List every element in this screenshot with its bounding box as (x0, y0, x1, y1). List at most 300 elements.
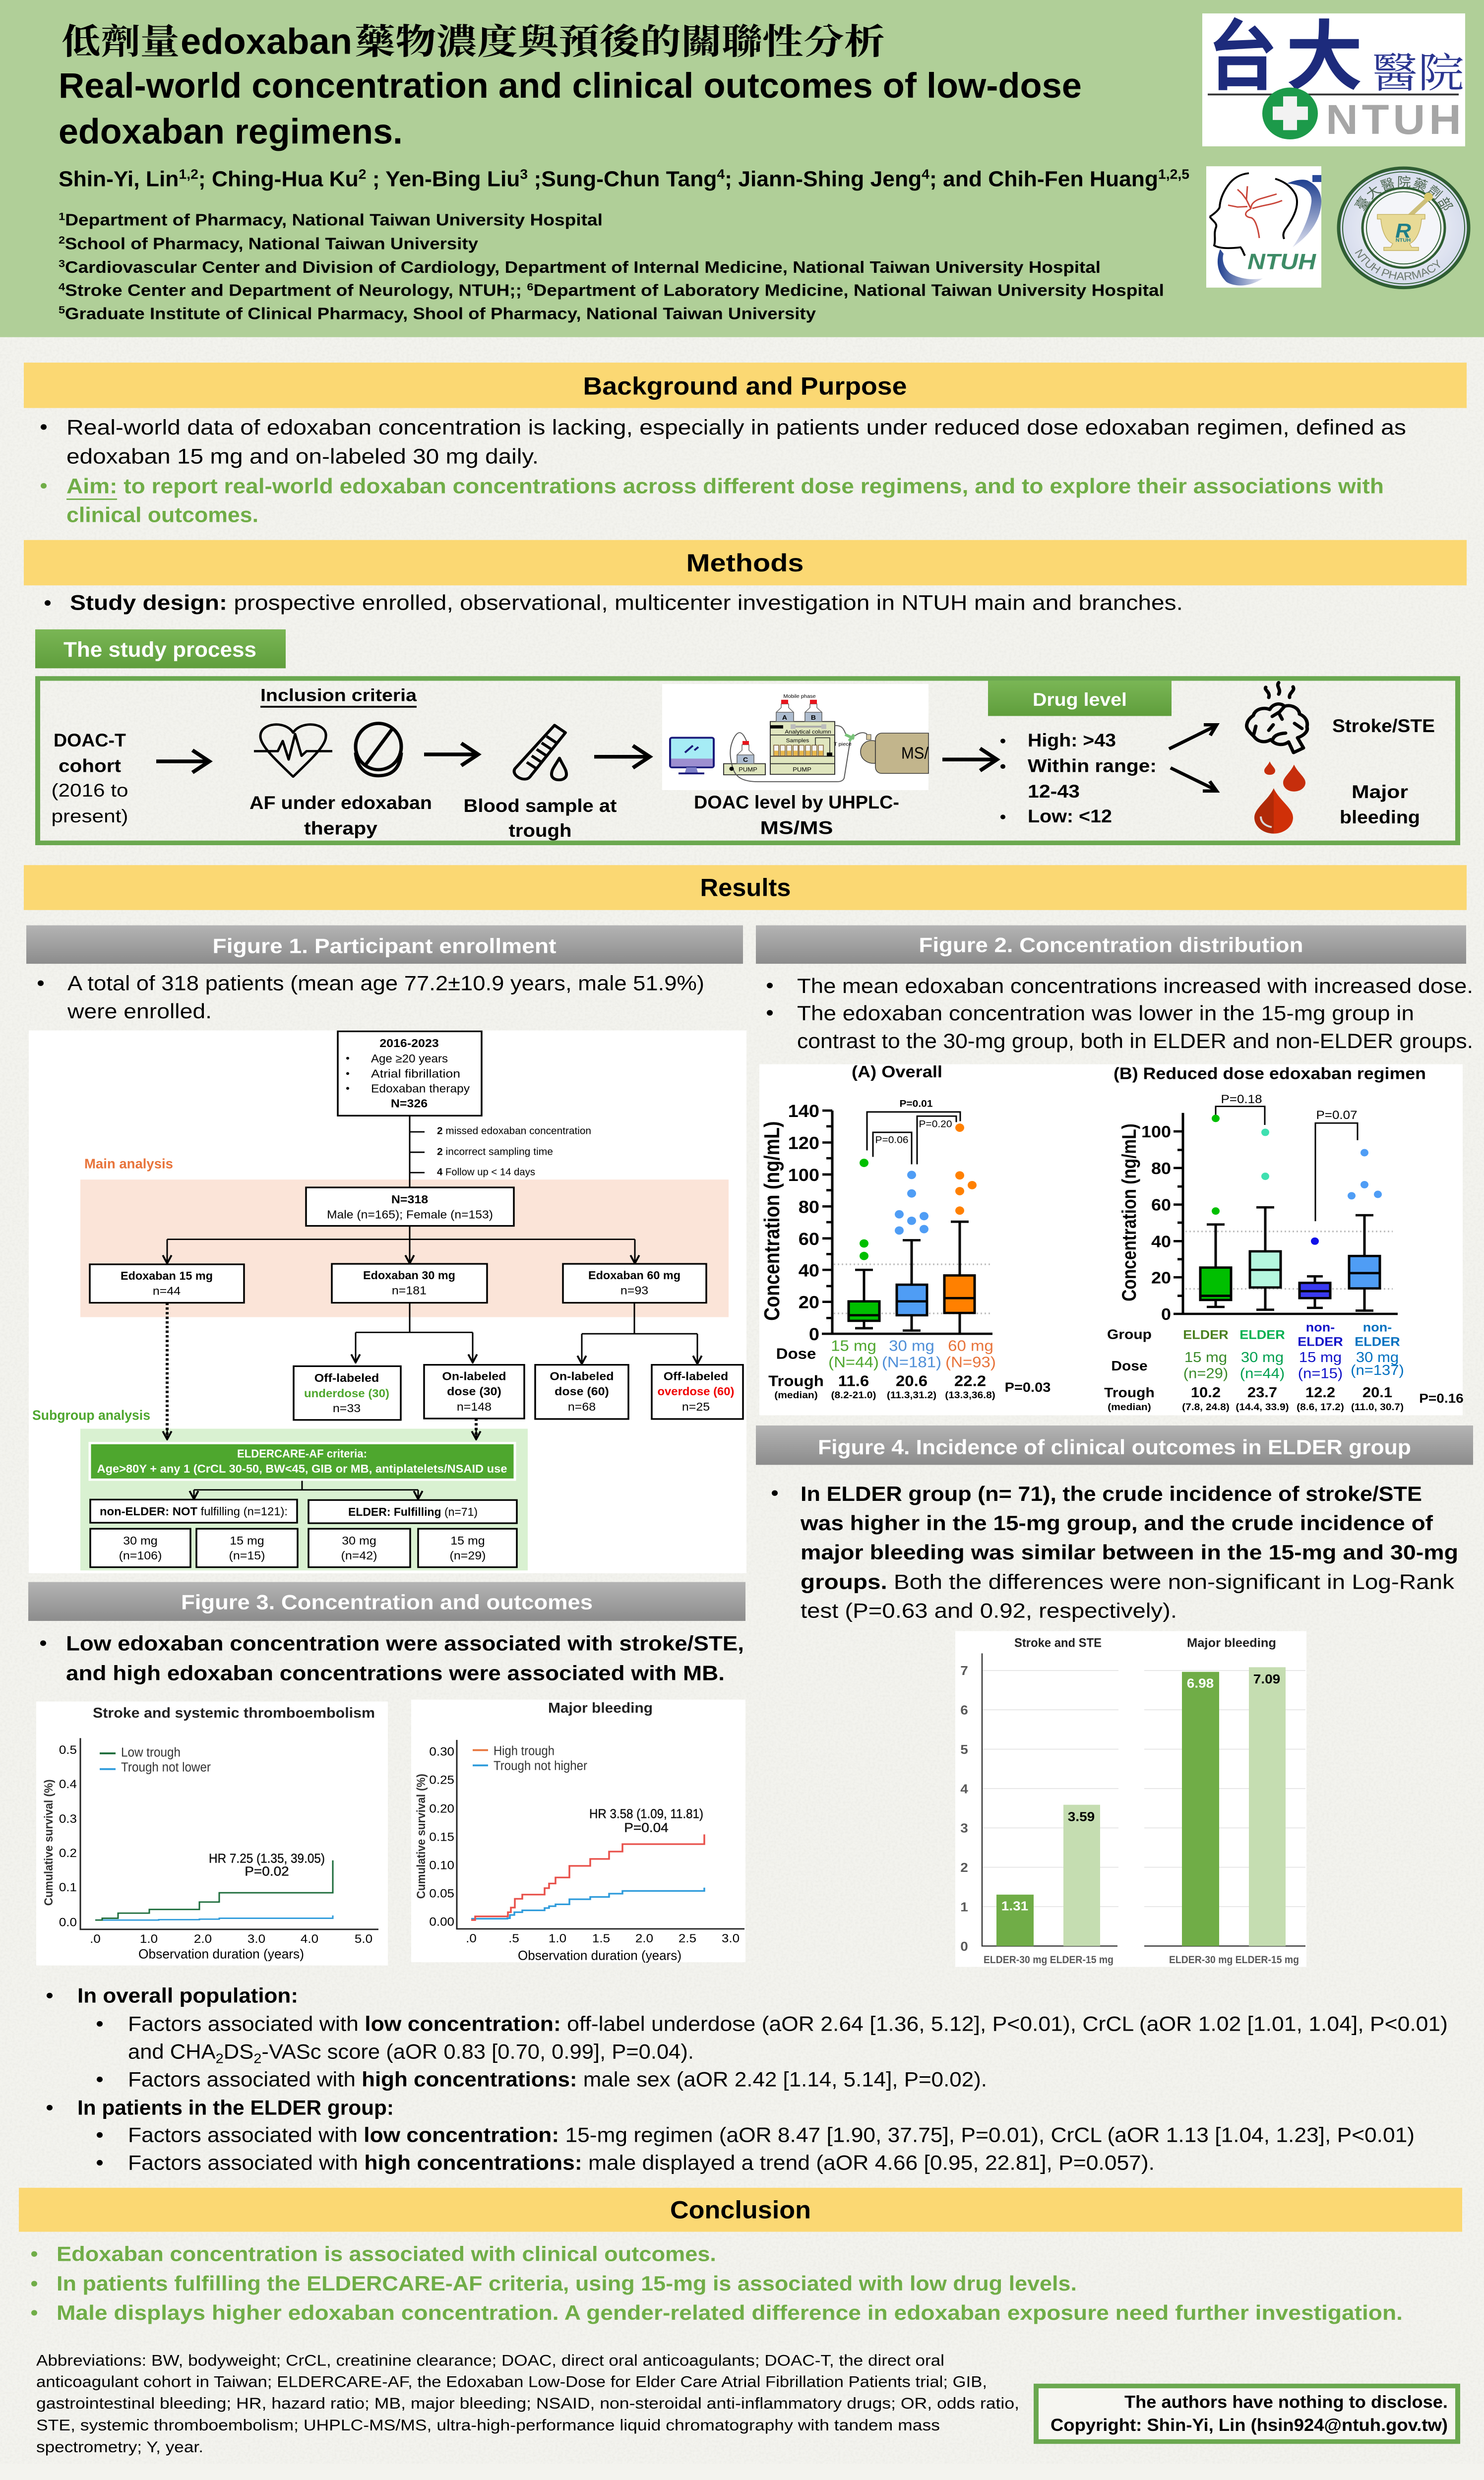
table: dose and trough: (N=44) (828, 1353, 879, 1370)
table: dose and trough: (N=181) (882, 1353, 941, 1370)
text block: figure 1: A total of 318 patients (mean age 77.2±10.9 years, male 51.9%) (67, 972, 704, 995)
icon: test tube and blood drop (514, 725, 566, 780)
authors: 2 (359, 167, 367, 182)
chart: major bleeding: 0.05 (429, 1887, 454, 1900)
text block: figure 3: Low edoxaban concentration were associated with stroke/STE, (66, 1632, 744, 1655)
text block: background: Real-world data of edoxaban concentration is lacking, especially in patients under reduced dose edoxaban regimen, defined as (66, 416, 1406, 439)
affiliations: 6 (527, 281, 534, 293)
logo: NTUH hospital (1202, 13, 1465, 146)
text block: abbreviations: anticoagulant cohort in Taiwan; ELDERCARE-AF, the Edoxaban Low-Dose for Elder Care Atrial Fibrillation Patients trial; GIB, (36, 2372, 987, 2390)
label: drug level: Drug level (1033, 689, 1127, 710)
arrow (156, 750, 209, 772)
table: group dose trough: (n=137) (1351, 1363, 1404, 1378)
table: group dose trough: 20.1 (1362, 1385, 1392, 1401)
icon: UHPLC instrument diagram: MS/ (901, 744, 928, 762)
text: exclusions (437, 1125, 591, 1178)
panel: study process (38, 679, 1458, 843)
bar: bleeding ELDER-30 mg: 6.98 (1187, 1675, 1214, 1690)
text block: figure 2: The mean edoxaban concentrations increased with increased dose. (797, 975, 1473, 998)
annotation: hazard ratio (589, 1806, 703, 1835)
box: off-labeled underdose: Off-labeled (314, 1372, 379, 1385)
text: DOAC-T cohort: (2016 to (51, 780, 128, 801)
box: 2016-2023 entry: Edoxaban therapy (371, 1082, 470, 1095)
axis labels: ELDER-30 mg ELDER-15 mg (984, 1954, 1113, 1966)
text block: figure 3 (40, 1632, 744, 1685)
table: dose and trough: P=0.03 (1005, 1380, 1051, 1395)
icon: UHPLC instrument diagram: Samples (786, 738, 809, 744)
chart: stroke and systemic thromboembolism: 0.2 (59, 1847, 77, 1860)
chart: (A) overall box plot: Concentration (ng/mL) (760, 1121, 784, 1321)
brackets: p values (867, 1099, 960, 1164)
arrow: to stroke (1169, 725, 1217, 749)
box: ELDER 15 mg (1200, 1115, 1231, 1307)
bar: bleeding ELDER-15 mg: 7.09 (1253, 1672, 1280, 1686)
heading: Figure 4: Figure 4. Incidence of clinical outcomes in ELDER group (818, 1436, 1411, 1459)
text block: background: edoxaban 15 mg and on-labeled 30 mg daily. (66, 445, 539, 468)
text block: background (41, 416, 1406, 468)
authors: ; Yen-Bing Liu (367, 167, 520, 191)
table: group dose trough: ELDER (1239, 1327, 1285, 1342)
arrow (424, 744, 478, 765)
box: edoxaban 30 mg: n=181 (392, 1284, 427, 1298)
table: group dose trough: Group (1107, 1327, 1152, 1342)
table: group dose trough: (7.8, 24.8) (1182, 1402, 1230, 1413)
table: dose and trough: 20.6 (896, 1372, 928, 1389)
bar: bleeding ELDER-30 mg (1182, 1672, 1219, 1946)
box: off-labeled underdose (294, 1366, 401, 1420)
text block: overall population factors: In overall population: (77, 1984, 298, 2007)
text block: ELDER group factors: Factors associated with low concentration: 15-mg regimen (aOR 8.47 [1.90, 37.75], P=0.01), CrCL (aOR 1.13 [1.04, 1.23], P<0.01) (128, 2124, 1415, 2147)
chart: (B) reduced dose box plot: 80 (1151, 1159, 1171, 1178)
table: group dose trough: 30 mg (1356, 1350, 1399, 1365)
table: group dose trough: P=0.16 (1419, 1391, 1464, 1406)
chart: (A) overall box plot: 20 (799, 1293, 819, 1312)
text: exclusions: 2 incorrect sampling time (437, 1146, 553, 1157)
box: on-labeled 60: dose (60) (555, 1385, 609, 1398)
box: non-ELDER 30 mg: 30 mg (123, 1535, 158, 1548)
chart: (B) reduced dose box plot: (B) Reduced dose edoxaban regimen (1113, 1064, 1426, 1083)
chart: stroke and systemic thromboembolism: 5.0 (355, 1932, 372, 1946)
chart: major bleeding: 0.15 (429, 1830, 454, 1844)
banner: ELDERCARE-AF criteria: Age>80Y + any 1 (CrCL 30-50, BW<45, GIB or MB, antiplatelets/NSAID use (97, 1463, 507, 1476)
box: non-ELDER 15 mg (196, 1529, 298, 1567)
box: edoxaban 30 mg: Edoxaban 30 mg (363, 1269, 455, 1282)
chart: incidence bar chart: 3 (960, 1821, 968, 1835)
box: non-ELDER 30 mg: (n=106) (119, 1550, 162, 1562)
curve: low trough (95, 1860, 333, 1920)
heading: Figure 3: Figure 3. Concentration and outcomes (181, 1591, 593, 1614)
icon: UHPLC instrument diagram: A (782, 714, 787, 721)
callout: disclosure and copyright (1036, 2386, 1458, 2442)
axis labels: ELDER-30 mg ELDER-15 mg (1169, 1954, 1299, 1966)
section heading: Background and Purpose (24, 363, 1467, 408)
text block: study design: Study design: prospective enrolled, observational, multicenter investigation in NTUH main and branches. (70, 591, 1183, 615)
table: group dose trough: non- (1363, 1320, 1392, 1334)
table: group dose trough: (n=29) (1183, 1366, 1228, 1381)
title: Chinese: 藥物濃度與預後的關聯性分析 (355, 22, 885, 62)
text block: conclusion: Male displays higher edoxaban concentration. A gender-related difference in edoxaban exposure need further investigation. (57, 2301, 1403, 2325)
chart: (B) reduced dose box plot (1104, 1064, 1464, 1413)
table: group dose trough: ELDER (1183, 1327, 1229, 1342)
text: DOAC-T cohort: DOAC-T (54, 730, 126, 751)
table: dose and trough: (median) (774, 1390, 818, 1401)
box: edoxaban 60 mg (563, 1264, 706, 1303)
table: group dose trough: (14.4, 33.9) (1236, 1402, 1289, 1413)
box: on-labeled 60: On-labeled (550, 1370, 614, 1383)
chart: (B) reduced dose box plot: 20 (1151, 1268, 1171, 1287)
title: Chinese (62, 21, 885, 62)
icon: UHPLC instrument diagram: T piece (834, 742, 852, 747)
text block: figure 4 (772, 1483, 1458, 1622)
bar: stroke ELDER-30 mg: 1.31 (1001, 1898, 1028, 1913)
text block: overall population factors: 2 (216, 2051, 224, 2066)
text block: overall population factors: -VASc score (aOR 0.83 [0.70, 0.99], P=0.04). (261, 2041, 694, 2063)
callout: disclosure and copyright: Copyright: Shin-Yi, Lin (hsin924@ntuh.gov.tw) (1051, 2415, 1448, 2435)
section heading: Background and Purpose: Background and Purpose (583, 372, 907, 400)
box: 2016-2023 entry: Atrial fibrillation (371, 1067, 460, 1081)
affiliations: 4 (59, 281, 65, 293)
authors: 4 (922, 167, 929, 182)
text: DOAC level by UHPLC-MS/MS (694, 792, 899, 838)
text: inclusion criteria: Inclusion criteria (260, 685, 417, 705)
brackets: p values: P=0.18 (1221, 1093, 1262, 1106)
text: drug level ranges: Within range: (1028, 756, 1157, 776)
table: group dose trough: 15 mg (1299, 1350, 1342, 1365)
title: English line 2: edoxaban regimens. (59, 112, 403, 151)
brackets: p values: P=0.01 (899, 1099, 933, 1109)
bar: stroke ELDER-15 mg (1063, 1805, 1100, 1946)
chart: stroke and systemic thromboembolism: 1.0 (140, 1932, 158, 1946)
authors: 1,2 (179, 167, 198, 182)
text: DOAC level by UHPLC-MS/MS: DOAC level by UHPLC- (694, 792, 899, 813)
table: group dose trough: (n=15) (1298, 1366, 1343, 1381)
text block: abbreviations: gastrointestinal bleeding; HR, hazard ratio; MB, major bleeding; NSAID, non-steroidal anti-inflammatory drugs; OR, odds ratio, (36, 2394, 1019, 2412)
text: blood sample at trough: trough (509, 820, 572, 841)
authors: 3 (520, 167, 528, 182)
text block: aim (41, 475, 1384, 527)
box: ELDER 15 mg: 15 mg (450, 1535, 485, 1548)
box: ELDER (309, 1500, 517, 1523)
header band (0, 0, 1484, 337)
text: drug level ranges (1000, 730, 1157, 827)
bar: stroke ELDER-30 mg (996, 1895, 1034, 1946)
box: off-labeled underdose: underdose (30) (304, 1387, 389, 1400)
table: group dose trough: 15 mg (1184, 1350, 1227, 1365)
box: off-labeled overdose: n=25 (682, 1401, 710, 1414)
text block: overall population factors: 2 (253, 2051, 261, 2066)
box: on-labeled 60 (535, 1365, 628, 1419)
icon: UHPLC instrument diagram: PUMP (793, 766, 811, 773)
chart: major bleeding: 0.20 (429, 1802, 454, 1815)
logo: NTUH hospital: 台 (1207, 14, 1278, 100)
label: drug level (988, 681, 1172, 716)
logo: NTUH hospital: 大 (1286, 14, 1363, 100)
table: dose and trough: Trough (768, 1372, 824, 1389)
icon: blood drops (1254, 761, 1305, 834)
table: group dose trough: 23.7 (1247, 1385, 1277, 1401)
table: group dose trough: ELDER (1355, 1334, 1400, 1349)
box: edoxaban 15 mg (90, 1264, 244, 1303)
chart: major bleeding: 0.25 (429, 1773, 454, 1787)
text: DOAC-T cohort (51, 730, 128, 827)
text: major bleeding (1340, 782, 1420, 828)
banner: ELDERCARE-AF criteria: ELDERCARE-AF criteria: (237, 1447, 367, 1460)
chart: (A) overall box plot: 140 (788, 1101, 819, 1121)
brackets: p values: P=0.06 (875, 1135, 909, 1145)
affiliations: Department of Pharmacy, National Taiwan University Hospital (65, 211, 603, 229)
text: DOAC-T cohort: present) (51, 806, 128, 827)
table: group dose trough: 12.2 (1305, 1385, 1335, 1401)
text block: overall population factors (47, 1984, 1448, 2091)
chart: (B) reduced dose box plot: 40 (1151, 1233, 1171, 1251)
affiliations: School of Pharmacy, National Taiwan University (65, 234, 479, 253)
affiliations (59, 210, 1164, 323)
chart: stroke and systemic thromboembolism: 0.1 (59, 1881, 77, 1894)
text: blood sample at trough (464, 796, 617, 841)
authors: Shin-Yi, Lin (59, 167, 186, 191)
text: major bleeding: Major (1352, 782, 1408, 802)
text block: aim: Aim: to report real-world edoxaban concentrations across different dose regimens, and to explore their associations with (66, 475, 1384, 498)
icon: UHPLC instrument diagram: Mobile phase (783, 693, 816, 699)
annotation: hazard ratio: P=0.02 (245, 1863, 289, 1878)
box: non-ELDER 15 mg: (n=15) (229, 1550, 265, 1562)
box: 2016-2023 entry: Age ≥20 years (371, 1053, 448, 1065)
affiliations: Stroke Center and Department of Neurology, NTUH;; (65, 281, 527, 300)
table: group dose trough: (8.6, 17.2) (1297, 1402, 1344, 1413)
flowchart: participant enrollment (29, 1030, 746, 1573)
chart: incidence bar chart (955, 1631, 1306, 1967)
text: stroke/STE: Stroke/STE (1332, 716, 1435, 737)
callout: disclosure and copyright: The authors have nothing to disclose. (1124, 2392, 1448, 2412)
label: subgroup analysis: Subgroup analysis (32, 1408, 150, 1424)
box: non-ELDER 15 mg (1299, 1238, 1330, 1308)
bar: stroke ELDER-15 mg: 3.59 (1068, 1809, 1095, 1824)
text block: figure 4: groups. Both the differences were non-significant in Log-Rank (801, 1571, 1454, 1594)
authors: 1,2,5 (1158, 167, 1189, 182)
icon: pill (356, 723, 401, 776)
table: dose and trough: 22.2 (954, 1372, 986, 1389)
icon: UHPLC instrument diagram (662, 684, 928, 790)
section heading: Results: Results (700, 874, 791, 902)
box: non-ELDER 15 mg: 15 mg (230, 1535, 264, 1548)
authors: 4 (717, 167, 725, 182)
chart: (A) overall box plot: (A) Overall (852, 1062, 942, 1081)
label: main analysis: Main analysis (84, 1157, 173, 1172)
heading: Figure 1 (26, 926, 743, 964)
text: drug level ranges: Low: <12 (1028, 806, 1112, 827)
table: dose and trough: 30 mg (889, 1337, 934, 1354)
annotation: hazard ratio: P=0.04 (624, 1820, 669, 1835)
text block: conclusion: In patients fulfilling the ELDERCARE-AF criteria, using 15-mg is associated with low drug levels. (57, 2272, 1077, 2295)
table: dose and trough: (11.3,31.2) (887, 1390, 936, 1401)
title: Chinese: edoxaban (181, 21, 352, 62)
chart: stroke and systemic thromboembolism (36, 1701, 388, 1966)
chart: major bleeding: 2.5 (679, 1932, 696, 1945)
box: N=318: Male (n=165); Female (n=153) (327, 1208, 493, 1221)
box: 2016-2023 entry: 2016-2023 (379, 1037, 439, 1050)
chart: incidence bar chart: 5 (960, 1742, 968, 1757)
chart: stroke and systemic thromboembolism: 4.0 (301, 1932, 318, 1946)
text block: figure 2: The edoxaban concentration was lower in the 15-mg group in (797, 1002, 1414, 1025)
chart: stroke and systemic thromboembolism: Cumulative survival (%) (42, 1779, 55, 1906)
heading: Figure 2: Figure 2. Concentration distribution (919, 934, 1303, 957)
chart: stroke and systemic thromboembolism: Observation duration (years) (138, 1947, 304, 1961)
chart: incidence bar chart: Stroke and STE (1014, 1635, 1102, 1650)
chart: major bleeding: .5 (508, 1932, 519, 1945)
box: 2016-2023 entry: N=326 (391, 1097, 428, 1110)
text block: ELDER group factors: In patients in the ELDER group: (77, 2097, 394, 2119)
table: dose and trough: 11.6 (838, 1372, 869, 1389)
chart: incidence bar chart: 4 (960, 1781, 968, 1796)
box: off-labeled underdose: n=33 (333, 1402, 361, 1415)
chart: major bleeding: Observation duration (years) (518, 1948, 681, 1963)
chart: (A) overall box plot: 120 (788, 1133, 819, 1153)
heading: Figure 4 (756, 1426, 1473, 1465)
chart: major bleeding: 1.5 (592, 1932, 610, 1945)
text block: overall population factors: DS (224, 2041, 253, 2063)
affiliations: 2 (59, 234, 65, 246)
box: on-labeled 30: On-labeled (442, 1370, 506, 1383)
authors: ; Jiann-Shing Jeng (725, 167, 922, 191)
logo: NTUH stroke head (1206, 166, 1321, 288)
chart: stroke and systemic thromboembolism: 0.0 (59, 1916, 77, 1929)
chart: major bleeding: 3.0 (722, 1932, 740, 1945)
box: 30 mg (895, 1171, 928, 1331)
box: edoxaban 30 mg (332, 1264, 487, 1303)
curve: trough not higher (471, 1888, 704, 1919)
table: group dose trough: 30 mg (1241, 1350, 1284, 1365)
chart: stroke and systemic thromboembolism: Stroke and systemic thromboembolism (93, 1705, 375, 1721)
text block: figure 2: contrast to the 30-mg group, both in ELDER and non-ELDER groups. (797, 1030, 1473, 1053)
chart: (B) reduced dose box plot: 0 (1161, 1305, 1171, 1324)
legend: Trough not higher (494, 1758, 587, 1773)
legend: Trough not lower (121, 1759, 211, 1774)
chart: (A) overall box plot: 0 (809, 1324, 819, 1344)
chart: major bleeding: 1.0 (549, 1932, 566, 1945)
text block: figure 1: were enrolled. (67, 1000, 212, 1023)
affiliations: 5 (59, 304, 65, 316)
box: 60 mg (944, 1123, 977, 1334)
text block: ELDER group factors: Factors associated with high concentrations: male displayed a trend (aOR 4.66 [0.95, 22.81], P=0.057). (128, 2152, 1155, 2174)
table: dose and trough (768, 1337, 1051, 1401)
chart: incidence bar chart: 2 (960, 1860, 968, 1875)
logo: NTUH hospital: 醫院 (1372, 51, 1464, 96)
box: N=318 (306, 1187, 514, 1226)
chart: major bleeding: .0 (466, 1932, 477, 1945)
table: group dose trough: 10.2 (1191, 1385, 1221, 1401)
text block: abbreviations: spectrometry; Y, year. (36, 2438, 203, 2456)
text block: figure 4: was higher in the 15-mg group, and the crude incidence of (800, 1512, 1433, 1535)
box: ELDER 30 mg (309, 1529, 410, 1567)
box: non-ELDER 30 mg (1348, 1149, 1382, 1310)
icon: UHPLC instrument diagram: B (811, 714, 816, 721)
box: edoxaban 15 mg: n=44 (153, 1285, 181, 1298)
box: on-labeled 30: dose (30) (447, 1385, 501, 1398)
logo: NTUH pharmacy seal: 臺大醫院藥劑部 (1354, 176, 1453, 211)
annotation: hazard ratio: HR 3.58 (1.09, 11.81) (589, 1806, 703, 1821)
arrow (942, 748, 997, 771)
annotation: hazard ratio: HR 7.25 (1.35, 39.05) (209, 1851, 325, 1865)
text block: figure 1 (38, 972, 704, 1023)
box: on-labeled 60: n=68 (568, 1401, 596, 1414)
icon: brain (1247, 682, 1307, 752)
chart: (B) reduced dose box plot: Concentration (ng/mL) (1118, 1123, 1140, 1302)
table: group dose trough: ELDER (1298, 1334, 1343, 1349)
authors: ; Ching-Hua Ku (198, 167, 359, 191)
text: AF under edoxaban therapy: AF under edoxaban (249, 793, 432, 813)
text: AF under edoxaban therapy: therapy (304, 818, 377, 839)
text block: conclusion: Edoxaban concentration is associated with clinical outcomes. (57, 2243, 716, 2266)
chart: (B) reduced dose box plot: 60 (1151, 1196, 1171, 1214)
box: off-labeled overdose: overdose (60) (658, 1385, 734, 1398)
chart: major bleeding (411, 1700, 745, 1963)
chart: incidence bar chart: 1 (960, 1899, 968, 1914)
icon: UHPLC instrument diagram: C (743, 756, 748, 763)
text block: figure 4: major bleeding was similar between in the 15-mg and 30-mg (801, 1541, 1458, 1564)
text: exclusions: 2 missed edoxaban concentration (437, 1125, 591, 1136)
icon: UHPLC instrument diagram: PUMP (739, 766, 757, 773)
box: non-ELDER: non-ELDER: NOT fulfilling (n=121): (100, 1505, 288, 1518)
box: N=318: N=318 (391, 1193, 428, 1206)
box: on-labeled 30: n=148 (457, 1401, 492, 1414)
logo: NTUH pharmacy seal: NTUH (1396, 238, 1411, 243)
chart: major bleeding: 0.00 (429, 1915, 454, 1928)
table: group dose trough: non- (1306, 1320, 1335, 1334)
section heading: Conclusion (19, 2188, 1462, 2232)
box: non-ELDER (90, 1499, 297, 1523)
section heading: Methods: Methods (686, 550, 804, 577)
text block: abbreviations (36, 2351, 1019, 2456)
icon: heart with ECG (254, 725, 332, 777)
box: off-labeled overdose: Off-labeled (664, 1370, 728, 1383)
logo: NTUH pharmacy seal (1337, 167, 1470, 290)
table: dose and trough: Dose (776, 1345, 816, 1362)
chart: incidence bar chart: 7 (960, 1663, 968, 1678)
text: exclusions: 4 Follow up < 14 days (437, 1166, 535, 1178)
title: English line 1: Real-world concentration and clinical outcomes of low-dose (59, 65, 1082, 105)
legend (473, 1743, 587, 1773)
box: ELDER 30 mg: 30 mg (342, 1535, 376, 1548)
text block: overall population factors: Factors associated with high concentrations: male sex (aOR 2.42 [1.14, 5.14], P=0.02). (128, 2068, 987, 2091)
table: group dose trough: (11.0, 30.7) (1351, 1402, 1404, 1413)
chart: major bleeding: Cumulative survival (%) (414, 1774, 428, 1899)
text: drug level ranges: 12-43 (1028, 781, 1080, 802)
chart: incidence bar chart: 0 (960, 1939, 968, 1954)
box: edoxaban 15 mg: Edoxaban 15 mg (121, 1270, 213, 1283)
brackets: p values: P=0.07 (1316, 1109, 1358, 1122)
annotation: hazard ratio (209, 1851, 325, 1878)
box: ELDER 15 mg (418, 1529, 517, 1567)
affiliations: Cardiovascular Center and Division of Cardiology, Department of Internal Medicine, National Taiwan University Hospital (65, 258, 1101, 277)
box: ELDER 15 mg: (n=29) (450, 1550, 486, 1562)
section heading: Conclusion: Conclusion (670, 2196, 811, 2224)
chart: incidence bar chart: 6 (960, 1702, 968, 1717)
chart: stroke and systemic thromboembolism: 3.0 (247, 1932, 265, 1946)
text block: overall population factors: Factors associated with low concentration: off-label underdose (aOR 2.64 [1.36, 5.12], P<0.01), CrCL (aOR 1.02 [1.01, 1.04], P<0.01) (128, 2013, 1448, 2036)
axis labels (984, 1954, 1299, 1966)
legend: High trough (494, 1743, 555, 1758)
chart: major bleeding: 0.10 (429, 1859, 454, 1872)
heading: Figure 2 (756, 926, 1466, 964)
chart: major bleeding: 0.30 (429, 1745, 454, 1758)
logo: NTUH hospital: NTUH (1326, 97, 1461, 143)
box: 15 mg (849, 1159, 879, 1328)
chart: major bleeding: Major bleeding (548, 1700, 653, 1716)
text: drug level ranges: High: >43 (1028, 730, 1116, 751)
table: group dose trough: (median) (1108, 1402, 1151, 1413)
table: dose and trough: (N=93) (945, 1353, 996, 1370)
chart: incidence bar chart: Major bleeding (1187, 1635, 1276, 1650)
